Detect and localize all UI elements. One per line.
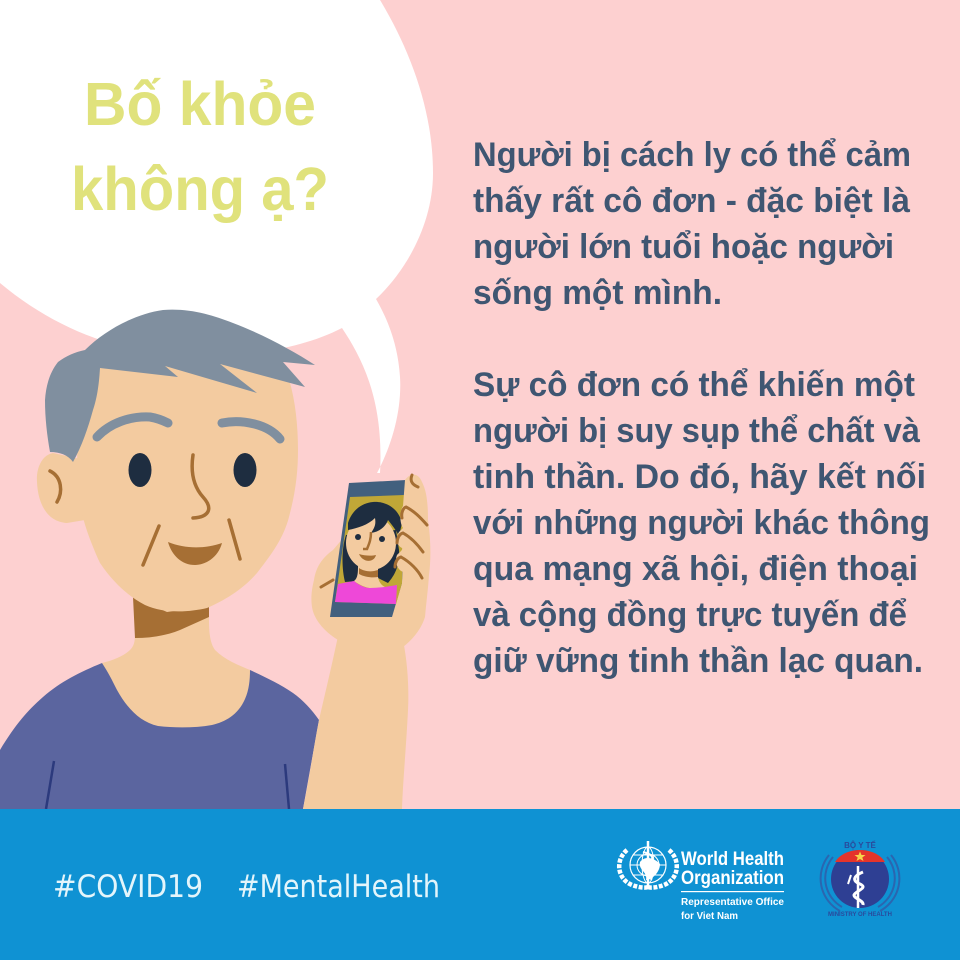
ear: [37, 453, 85, 523]
long hair: [342, 530, 399, 583]
forearm: [303, 636, 408, 809]
WHO name: [681, 849, 784, 889]
ministry lettering: BỘ Y TẾ: [844, 840, 877, 850]
hair: [45, 310, 315, 462]
inner disc: [831, 850, 889, 908]
body text: giữ vững tinh thần lạc quan.: [473, 642, 923, 680]
wrinkles: [143, 520, 240, 565]
body text: người lớn tuổi hoặc người: [473, 228, 894, 266]
ministry lettering: MINISTRY OF HEALTH: [828, 912, 892, 918]
mouth: [168, 542, 222, 565]
WHO name: World Health: [681, 849, 784, 870]
star: [854, 852, 866, 861]
body text: qua mạng xã hội, điện thoại: [473, 550, 918, 588]
ministry lettering: [828, 840, 892, 918]
finger lines: [321, 475, 427, 587]
woman neck shadow: [359, 568, 378, 577]
title: [71, 70, 329, 223]
footer band: [0, 809, 960, 960]
shirt folds: [46, 761, 289, 809]
hashtags: #COVID19: [53, 869, 203, 905]
red banner: [835, 850, 885, 862]
body text: thấy rất cô đơn - đặc biệt là: [473, 182, 911, 220]
body text: và cộng đồng trực tuyến để: [473, 596, 907, 634]
logo: Ministry of Health: [821, 840, 899, 918]
nose: [192, 455, 209, 518]
shirt: [0, 663, 319, 809]
body text: với những người khác thông: [473, 504, 930, 542]
WHO divider: [681, 891, 784, 892]
left eyebrow: [97, 417, 168, 437]
woman features: [355, 532, 385, 561]
hashtags: [53, 869, 440, 905]
body text: sống một mình.: [473, 274, 722, 312]
left eye: [128, 453, 152, 487]
neck shadow: [133, 597, 209, 638]
neck and chest: [102, 590, 250, 727]
hashtags: #MentalHealth: [237, 869, 440, 905]
ear line: [50, 471, 61, 502]
body text: Người bị cách ly có thể cảm: [473, 136, 911, 174]
body text: người bị suy sụp thể chất và: [473, 412, 921, 450]
illustration: older man holding phone: [0, 310, 430, 809]
title: Bố khỏe: [84, 70, 316, 138]
title: không ạ?: [71, 155, 329, 223]
fringe: [348, 502, 402, 536]
hand: [311, 530, 426, 647]
body text: [473, 136, 930, 680]
outer ring: [821, 855, 899, 911]
woman face: [346, 516, 396, 570]
body text: Sự cô đơn có thể khiến một: [473, 366, 915, 404]
woman shoulders: [335, 581, 397, 604]
speech bubble: [0, 0, 433, 473]
face: [77, 340, 298, 611]
logo: World Health Organization: [619, 841, 784, 922]
WHO office: [681, 896, 784, 922]
WHO office: for Viet Nam: [681, 910, 738, 922]
WHO emblem: [619, 841, 677, 888]
phone screen: [335, 495, 404, 604]
right eyebrow: [222, 422, 280, 439]
WHO name: Organization: [681, 868, 784, 889]
right eye: [234, 453, 256, 487]
woman on phone: [335, 502, 402, 604]
woman neck: [354, 565, 385, 589]
fingers: [396, 475, 430, 617]
phone: [330, 480, 406, 617]
staff and serpent: [848, 866, 863, 908]
WHO office: Representative Office: [681, 896, 784, 908]
body text: tinh thần. Do đó, hãy kết nối: [473, 458, 926, 496]
